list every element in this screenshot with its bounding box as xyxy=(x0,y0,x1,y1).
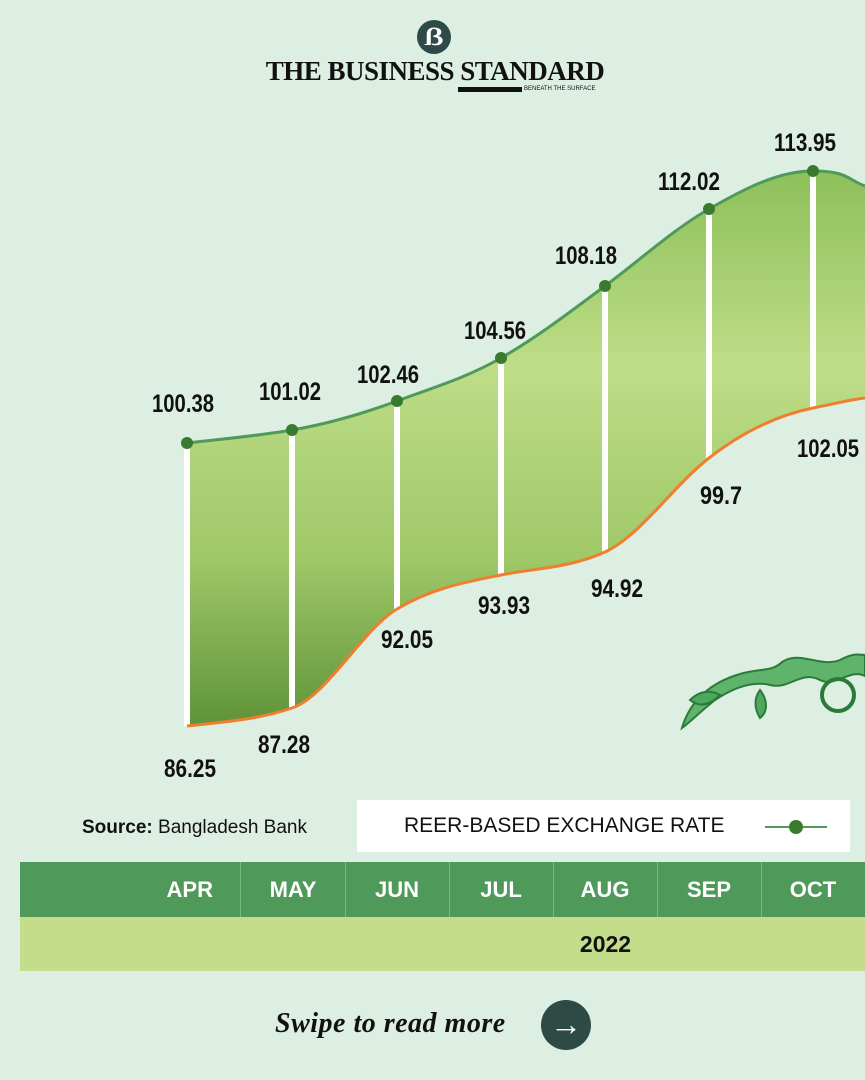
source: Source: Bangladesh Bank xyxy=(82,817,307,838)
upper labels: 108.18 xyxy=(555,242,617,270)
legend: REER-BASED EXCHANGE RATE xyxy=(404,814,725,837)
legend xyxy=(357,800,850,852)
upper labels: 113.95 xyxy=(774,129,836,157)
lower labels: 86.25 xyxy=(164,755,216,783)
month header: OCT xyxy=(790,877,836,902)
tagline xyxy=(458,86,596,92)
lower labels: 92.05 xyxy=(381,626,433,654)
month header: MAY xyxy=(270,877,316,902)
month header: APR xyxy=(167,877,213,902)
lower labels: 94.92 xyxy=(591,575,643,603)
lower labels: 87.28 xyxy=(258,731,310,759)
upper line REER xyxy=(181,165,865,449)
legend marker xyxy=(765,826,827,828)
lower labels: 93.93 xyxy=(478,592,530,620)
tagline: BENEATH THE SURFACE xyxy=(524,86,595,92)
icon: arrow circle xyxy=(541,1000,591,1050)
upper labels: 100.38 xyxy=(152,390,214,418)
month header xyxy=(20,862,865,917)
month header: SEP xyxy=(687,877,731,902)
logo xyxy=(266,20,604,92)
upper labels: 102.46 xyxy=(357,361,419,389)
month header: JUL xyxy=(480,877,522,902)
month header: AUG xyxy=(581,877,629,902)
white bars xyxy=(184,171,816,726)
upper labels: 104.56 xyxy=(464,317,526,345)
year row xyxy=(20,917,865,971)
swipe prompt xyxy=(275,1000,591,1050)
swipe prompt: Swipe to read more xyxy=(275,1008,506,1039)
upper labels: 112.02 xyxy=(658,168,720,196)
lower line xyxy=(187,398,865,726)
masthead text: THE BUSINESS STANDARD xyxy=(266,56,604,86)
lower labels xyxy=(164,435,859,783)
ornament: vine xyxy=(682,654,865,728)
month header: JUN xyxy=(375,877,419,902)
icon: logo mark: ẞ xyxy=(424,22,444,51)
upper labels: 101.02 xyxy=(259,378,321,406)
lower labels: 99.7 xyxy=(700,482,742,510)
icon: arrow circle: → xyxy=(550,1006,582,1042)
year row: 2022 xyxy=(580,931,631,957)
icon: logo mark xyxy=(417,20,451,54)
upper labels xyxy=(152,129,836,418)
